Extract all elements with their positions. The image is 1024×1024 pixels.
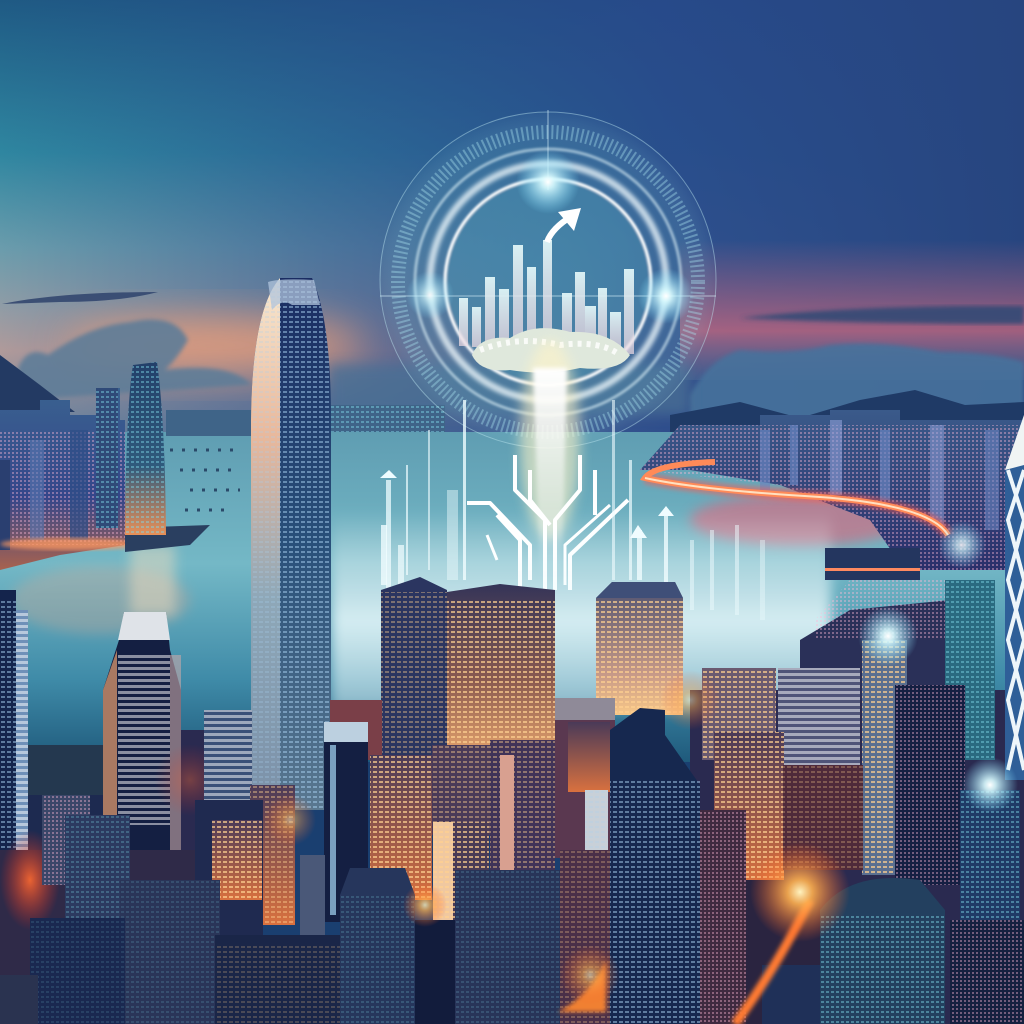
mid-rise towers [381,577,683,762]
sky background [0,0,1024,450]
city haze behind the foreground [0,548,1024,1024]
foreground buildings: lower row [0,708,1024,1024]
hologram: light trunk [520,340,580,580]
hologram: data tree crown [472,328,630,373]
hologram: glowing rings [380,110,716,448]
hologram: growth arrow [547,208,581,242]
far skyline right shore [640,410,1024,570]
curved bridge [645,462,948,535]
distant mountains [0,355,1024,450]
light glows [264,150,1018,1005]
left edge towers [0,590,28,1024]
hologram: bar chart [459,240,634,354]
second tower far left [125,362,166,535]
clouds [2,292,1024,420]
far skyline left shore [0,388,445,570]
low fog over the water [331,510,831,710]
harbour water [0,432,1024,762]
tall glass tower [251,278,331,810]
light rods rising from the water [380,400,765,620]
dark tower with lit floors [103,612,181,870]
lattice tower at right edge [1005,415,1024,780]
hologram: circuit roots [467,455,628,590]
foreground buildings: upper row [42,580,995,922]
